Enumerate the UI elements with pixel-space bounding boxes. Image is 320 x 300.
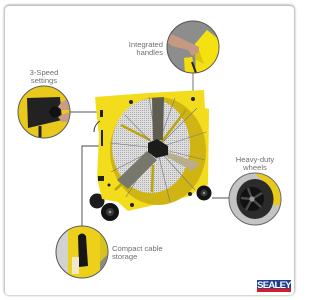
label: heavy-duty wheels: wheels	[243, 163, 267, 172]
yellow corner	[254, 173, 282, 205]
yellow panel	[68, 226, 100, 278]
label: 3-speed settings	[30, 68, 58, 85]
dial	[50, 106, 60, 118]
control box	[27, 97, 62, 128]
inset: cable storage	[56, 226, 108, 278]
rear left wheel	[90, 194, 104, 208]
right wheel	[196, 186, 212, 200]
label: integrated handles: handles	[136, 48, 163, 57]
yellow handle	[184, 30, 220, 74]
hand fingers	[58, 100, 70, 110]
slot	[192, 62, 196, 73]
grille struts	[115, 110, 186, 192]
housing shroud ring	[110, 97, 206, 205]
label: heavy-duty wheels	[236, 155, 274, 172]
label: compact cable storage: storage	[112, 252, 137, 261]
cable	[38, 126, 42, 138]
spokes	[241, 188, 262, 210]
inset: wheel	[229, 173, 282, 225]
label: compact cable storage	[112, 244, 163, 261]
connector: speed settings	[70, 111, 99, 113]
housing bolts	[108, 97, 195, 207]
fan housing	[95, 90, 209, 211]
hand	[167, 33, 199, 56]
inset: speed control	[18, 86, 72, 140]
guard wires	[110, 97, 206, 202]
label: 3-speed settings: 3-Speed	[30, 68, 58, 77]
label: integrated handles	[129, 40, 163, 57]
fan hub	[148, 139, 168, 158]
fan grille	[112, 99, 190, 193]
hub	[240, 187, 264, 211]
label: integrated handles: Integrated	[129, 40, 163, 49]
connector: cable storage	[82, 146, 100, 226]
label: heavy-duty wheels: Heavy-duty	[236, 155, 274, 164]
fan illustration	[90, 90, 212, 221]
logo: SEALEY: SEALEY	[257, 280, 291, 291]
side latch and cord	[98, 110, 104, 181]
label: 3-speed settings: settings	[31, 76, 57, 85]
front wheel	[101, 203, 119, 221]
fan blades	[152, 97, 164, 140]
tyre	[236, 179, 274, 219]
label: compact cable storage: Compact cable	[112, 244, 163, 253]
coiled cable	[78, 234, 88, 267]
plug	[72, 257, 79, 274]
inset: handles	[167, 21, 220, 74]
connector: handles	[192, 73, 194, 92]
connector: wheels	[212, 197, 230, 199]
